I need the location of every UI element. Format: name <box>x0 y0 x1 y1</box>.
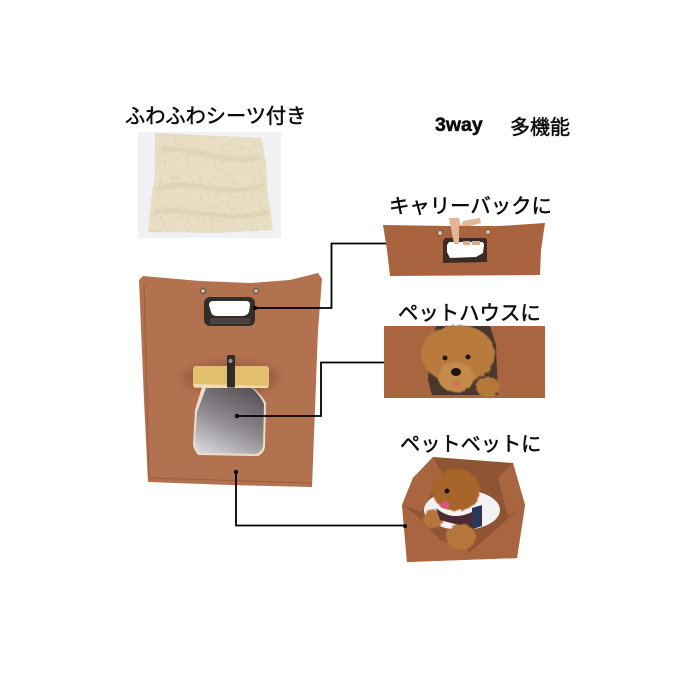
back wall <box>402 457 525 562</box>
photo: pet bed use <box>402 457 525 562</box>
door opening <box>428 326 498 395</box>
photo: fleece sheet <box>138 132 281 238</box>
connector: base to bed <box>234 470 407 528</box>
front wall <box>402 505 525 562</box>
heading: pet bed: ペットベットに <box>400 434 541 456</box>
scarf <box>436 506 482 530</box>
heading: pet house: ペットハウスに <box>398 303 541 325</box>
bag body <box>139 273 322 487</box>
heading: multifunction: 多機能 <box>510 116 570 139</box>
white cushion <box>424 490 500 530</box>
heading: carrier bag: キャリーバックに <box>389 195 552 218</box>
connector: door to house <box>235 360 389 418</box>
rolled flap <box>183 355 279 394</box>
connector: handle to carrier <box>253 242 393 310</box>
poodle paw <box>446 524 476 550</box>
poodle head <box>423 469 480 528</box>
eyelets <box>200 288 258 294</box>
poodle <box>421 325 500 397</box>
handle hole <box>443 238 487 263</box>
hand <box>449 218 481 244</box>
handle <box>204 297 255 326</box>
door opening <box>193 387 266 456</box>
main bag illustration <box>139 273 322 487</box>
photo: carrier bag use <box>383 218 545 276</box>
heading: fluffy sheet: ふわふわシーツ付き <box>125 105 306 128</box>
heading: 3way: 3way <box>435 114 483 136</box>
photo: pet house use <box>384 325 545 398</box>
